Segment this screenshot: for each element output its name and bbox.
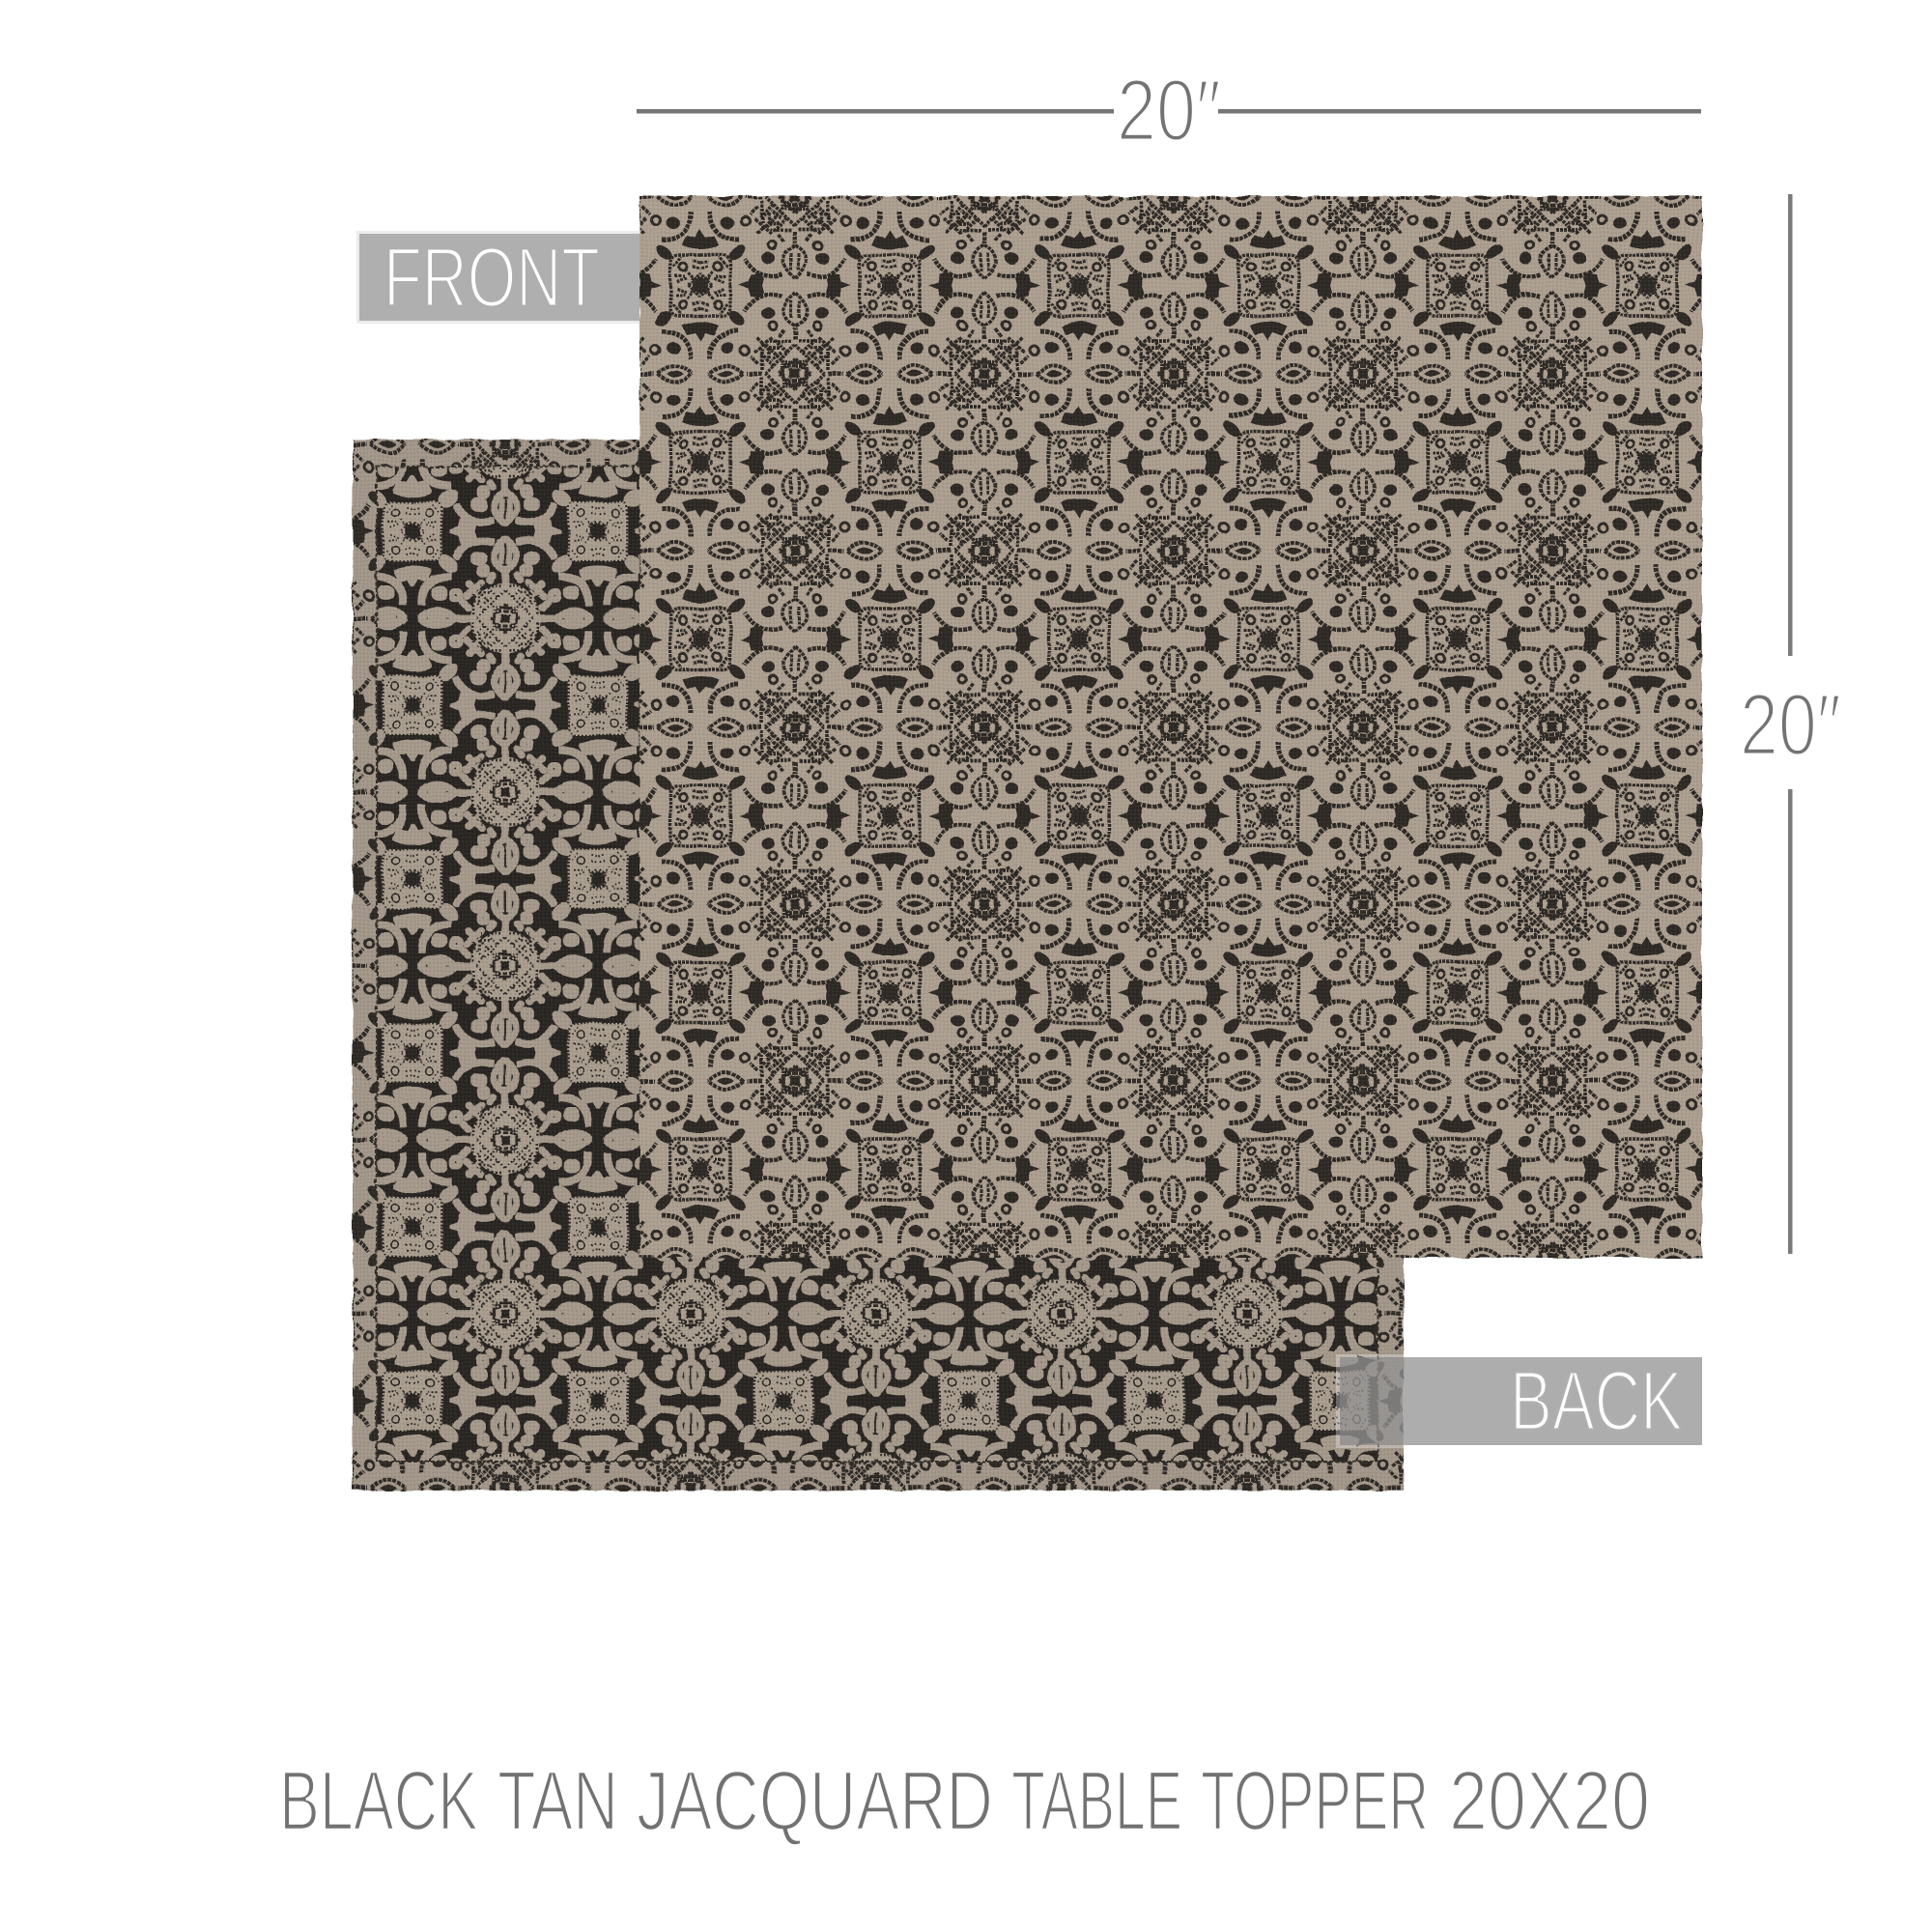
dimension: top width 20 inches — [637, 63, 1701, 159]
title: product name: TABLE — [1011, 1754, 1182, 1848]
title: product name: TAN — [497, 1754, 618, 1848]
back inverted jacquard field — [377, 467, 1378, 1462]
dimension: top width 20 inches: 20″ — [1117, 63, 1221, 159]
back weave texture — [353, 440, 1404, 1491]
dimension: right height 20 inches — [1740, 194, 1841, 1254]
back hem stitching — [377, 467, 1378, 1462]
back hem band — [353, 440, 1404, 1491]
label: BACK: BACK — [1510, 1354, 1683, 1448]
title: product name — [279, 1754, 1650, 1848]
title: product name: TOPPER — [1201, 1754, 1429, 1848]
title: product name: 20X20 — [1449, 1754, 1650, 1848]
label: FRONT: FRONT — [384, 231, 600, 325]
label: BACK — [1336, 1354, 1705, 1448]
dimension: right height 20 inches: 20″ — [1740, 677, 1841, 774]
front jacquard field — [639, 196, 1702, 1258]
front weave texture — [639, 196, 1702, 1258]
title: product name: JACQUARD — [637, 1754, 993, 1848]
title: product name: BLACK — [279, 1754, 478, 1848]
panel: back of table topper — [353, 440, 1404, 1491]
panel: front of table topper — [639, 196, 1702, 1258]
